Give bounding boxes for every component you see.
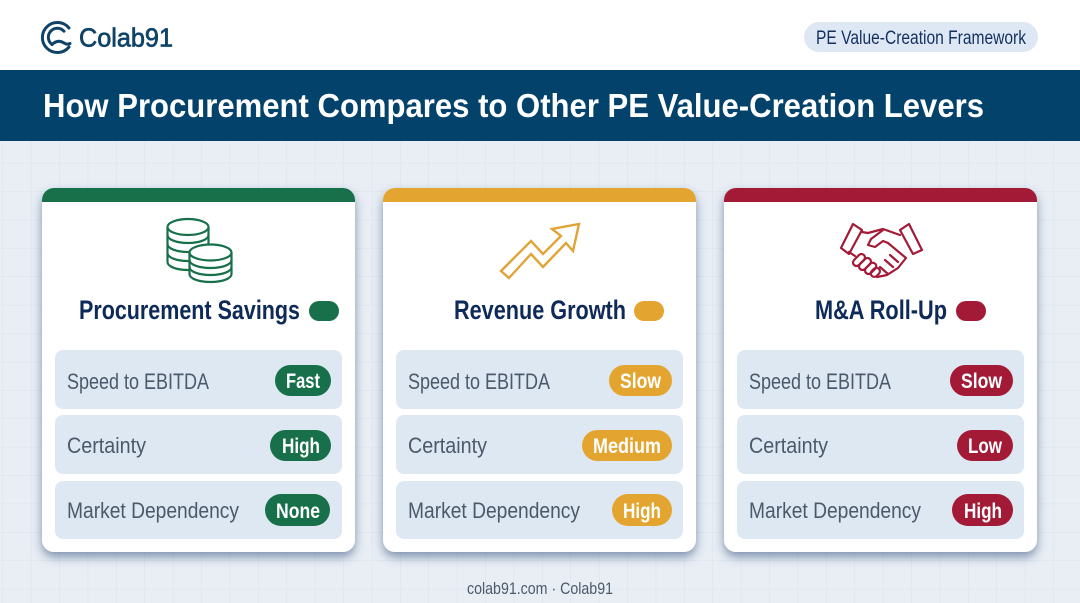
row: speed to ebitda: Slow	[620, 370, 662, 393]
row: certainty: High	[282, 435, 320, 458]
logo	[42, 22, 173, 52]
icon: coin stacks	[168, 219, 232, 282]
framework badge: PE Value-Creation Framework	[816, 28, 1026, 49]
page background grid	[0, 141, 1080, 603]
row: certainty: Certainty	[408, 433, 487, 458]
framework badge	[804, 22, 1038, 52]
row: certainty: Certainty	[67, 433, 146, 458]
row: market dependency: High	[964, 500, 1002, 523]
row: speed to ebitda: Speed to EBITDA	[408, 369, 550, 394]
heading: procurement savings: Procurement Savings	[79, 295, 300, 325]
panel: revenue growth	[383, 188, 696, 552]
panel: procurement savings	[42, 188, 355, 552]
footer: colab91.com · Colab91	[467, 579, 613, 598]
row: certainty: Medium	[593, 435, 661, 458]
row: speed to ebitda: Slow	[961, 370, 1003, 393]
row: speed to ebitda	[737, 350, 1024, 409]
heading: m&a roll-up: M&A Roll-Up	[815, 295, 947, 325]
row: speed to ebitda: Speed to EBITDA	[749, 369, 891, 394]
title banner	[0, 70, 1080, 141]
row: certainty	[55, 415, 342, 474]
row: market dependency: None	[276, 500, 320, 523]
row: certainty	[396, 415, 683, 474]
row: certainty: Certainty	[749, 433, 828, 458]
row: speed to ebitda	[396, 350, 683, 409]
panel: m&a roll-up	[724, 188, 1037, 552]
row: market dependency	[737, 481, 1024, 539]
row: speed to ebitda: Fast	[286, 370, 320, 393]
logo wordmark: Colab91	[79, 22, 173, 52]
row: market dependency: Market Dependency	[67, 498, 239, 523]
row: market dependency: High	[623, 500, 661, 523]
heading: revenue growth: Revenue Growth	[454, 295, 626, 325]
title banner: How Procurement Compares to Other PE Value-Creation Levers	[43, 87, 984, 124]
header bar	[0, 0, 1080, 70]
row: speed to ebitda: Speed to EBITDA	[67, 369, 209, 394]
row: speed to ebitda	[55, 350, 342, 409]
icon: rising arrow	[501, 224, 579, 278]
row: certainty	[737, 415, 1024, 474]
row: market dependency	[55, 481, 342, 539]
row: market dependency: Market Dependency	[749, 498, 921, 523]
icon: handshake	[841, 224, 922, 278]
row: market dependency	[396, 481, 683, 539]
row: certainty: Low	[968, 435, 1003, 458]
row: market dependency: Market Dependency	[408, 498, 580, 523]
icon: colab91 logo mark	[42, 23, 70, 52]
